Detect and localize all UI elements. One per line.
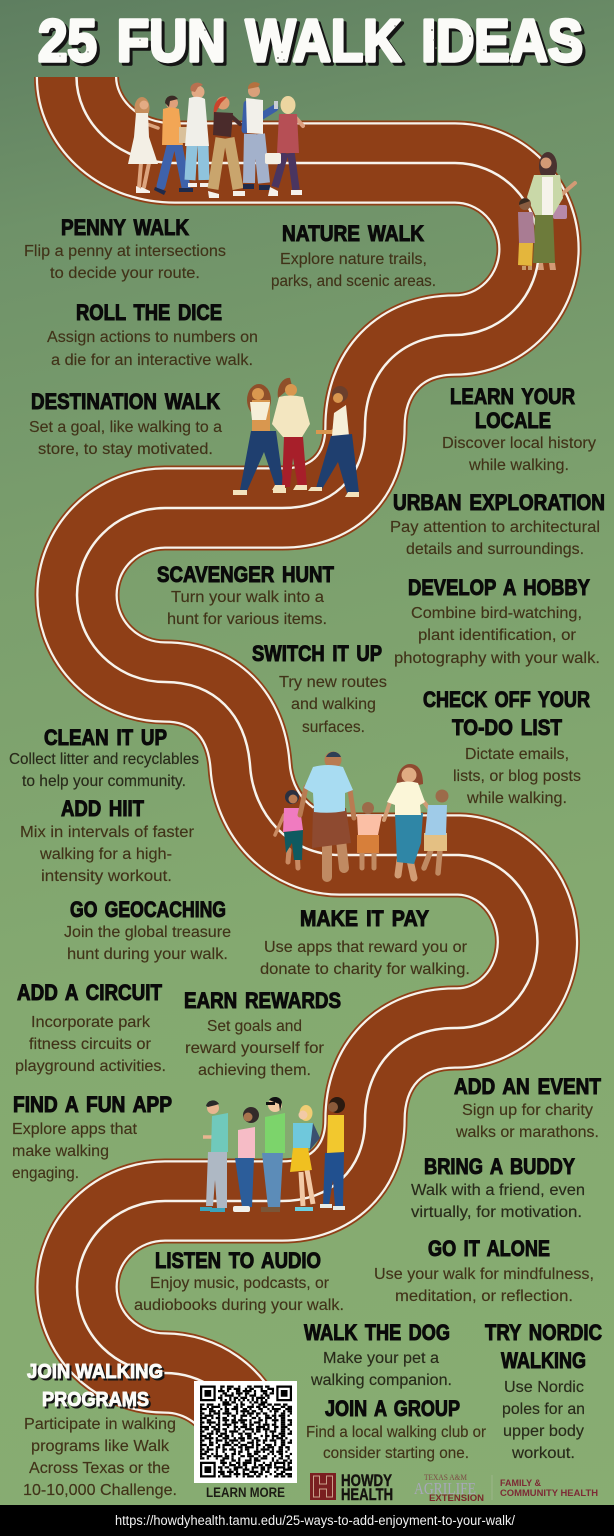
heading: WALK THE DOG [304, 1320, 450, 1345]
logo: Family & Community Health: FAMILY & [500, 1478, 541, 1489]
description [185, 1018, 325, 1079]
mother [527, 152, 575, 270]
learn more label: LEARN MORE [206, 1485, 285, 1500]
walker: woman in white dress [128, 97, 158, 193]
description: store, to stay motivated. [38, 441, 213, 458]
heading: GO GEOCACHING [70, 897, 226, 922]
running track [76, 77, 539, 1432]
description [271, 251, 436, 290]
description [23, 1416, 177, 1499]
description: details and surroundings. [406, 541, 584, 558]
heading [485, 1320, 602, 1373]
idea: Add HIIT [20, 796, 195, 885]
description: Flip a penny at intersections [24, 243, 226, 260]
man looking at phone [200, 1100, 228, 1212]
description [279, 674, 387, 736]
idea: Penny Walk [24, 215, 226, 282]
idea: Nature Walk [271, 221, 436, 290]
idea: Scavenger Hunt [157, 562, 334, 628]
heading [27, 1360, 163, 1411]
idea: Develop a Hobby [394, 575, 600, 667]
idea: Listen to Audio [134, 1248, 344, 1314]
heading: SWITCH IT UP [252, 641, 382, 666]
idea: Walk the Dog [304, 1320, 452, 1389]
description: and walking [291, 696, 376, 713]
description [306, 1424, 487, 1462]
heading: TO-DO LIST [452, 715, 562, 740]
walker: lab coat [185, 83, 210, 187]
heading: GO IT ALONE [428, 1236, 550, 1261]
description [167, 589, 327, 628]
description: Enjoy music, podcasts, or [150, 1275, 330, 1292]
description: workout. [511, 1445, 575, 1462]
description [64, 924, 231, 963]
description [260, 939, 470, 978]
idea: Check Off Your To-Do List [423, 687, 590, 807]
illustration: group of six walkers [128, 82, 303, 198]
description: surfaces. [302, 719, 365, 736]
heading: LISTEN TO AUDIO [155, 1248, 321, 1273]
woman in white crop top [233, 384, 286, 495]
description [502, 1379, 585, 1462]
heading: WALKING [501, 1348, 586, 1373]
idea: Join a Group [306, 1396, 487, 1462]
description: Walk with a friend, even [411, 1182, 585, 1199]
heading: JOIN A GROUP [325, 1396, 460, 1421]
heading [423, 687, 590, 740]
description: while walking. [466, 790, 567, 807]
description: Discover local history [442, 435, 596, 452]
heading: LOCALE [475, 408, 551, 433]
description: Join the global treasure [64, 924, 231, 941]
description: donate to charity for walking. [260, 961, 470, 978]
heading: LEARN YOUR [450, 384, 575, 409]
woman with short hair [308, 386, 359, 497]
description: Turn your walk into a [171, 589, 324, 606]
father [300, 752, 354, 877]
description: Collect litter and recyclables [9, 751, 199, 768]
description: Across Texas or the [29, 1460, 170, 1477]
description: Assign actions to numbers on [47, 329, 258, 346]
description [12, 1121, 138, 1182]
idea: Try Nordic Walking [485, 1320, 602, 1462]
description: while walking. [468, 457, 569, 474]
description: a die for an interactive walk. [51, 352, 253, 369]
description: 10-10,000 Challenge. [23, 1482, 177, 1499]
description: plant identification, or [418, 627, 577, 644]
illustration: five people standing in line [200, 1097, 345, 1212]
logo: Family & Community Health: COMMUNITY HEALTH [500, 1488, 598, 1499]
description: Mix in intervals of faster [20, 824, 195, 841]
description [29, 419, 222, 458]
heading: JOIN WALKING [27, 1360, 163, 1383]
man in sunglasses [261, 1097, 285, 1212]
heading: PENNY WALK [61, 215, 189, 240]
description: make walking [12, 1143, 109, 1160]
heading: BRING A BUDDY [424, 1154, 575, 1179]
heading: ROLL THE DICE [76, 300, 222, 325]
description: poles for an [502, 1401, 585, 1418]
idea: Find a Fun App [12, 1092, 172, 1182]
idea: Roll the Dice [47, 300, 258, 369]
heading: MAKE IT PAY [300, 906, 429, 931]
description: Set goals and [207, 1018, 302, 1035]
description: Participate in walking [24, 1416, 176, 1433]
description [411, 1182, 585, 1221]
description: audiobooks during your walk. [134, 1297, 344, 1314]
description: photography with your walk. [394, 650, 600, 667]
heading: NATURE WALK [282, 221, 424, 246]
description [9, 751, 199, 790]
illustration: three women walking [233, 378, 359, 497]
description [453, 746, 581, 807]
idea: Join Walking Programs [23, 1360, 177, 1499]
description: parks, and scenic areas. [271, 273, 436, 290]
description: to help your community. [22, 773, 186, 790]
description [455, 1102, 599, 1141]
description: walks or marathons. [455, 1124, 599, 1141]
small boy [357, 802, 382, 868]
illustration: family holding hands [275, 752, 448, 878]
walker: orange shirt [154, 96, 195, 195]
logo: Family & Community Health [492, 1475, 598, 1500]
logo: Texas A&M AgriLife Extension: AGRILIFE [414, 1479, 476, 1498]
description: walking for a high- [39, 846, 172, 863]
description: Use Nordic [504, 1379, 584, 1396]
description: consider starting one. [323, 1445, 469, 1462]
idea: Go It Alone [374, 1236, 594, 1305]
description: reward yourself for [185, 1040, 325, 1057]
description: Explore apps that [12, 1121, 138, 1138]
description: upper body [503, 1423, 584, 1440]
QR code [194, 1381, 297, 1483]
description: achieving them. [198, 1062, 311, 1079]
footer bar with URL [0, 1505, 614, 1536]
description [47, 329, 258, 369]
description: Sign up for charity [462, 1102, 593, 1119]
walker: man in vest with phone [243, 82, 278, 190]
man in yellow shirt [320, 1097, 345, 1210]
idea: Bring a Buddy [411, 1154, 585, 1221]
idea: Switch It Up [252, 641, 387, 736]
idea: Destination Walk [29, 389, 222, 458]
description: to decide your route. [50, 265, 200, 282]
description: Explore nature trails, [280, 251, 427, 268]
logo: Texas A&M AgriLife Extension [414, 1472, 484, 1503]
description: Use your walk for mindfulness, [374, 1266, 594, 1283]
idea: Go Geocaching [64, 897, 231, 963]
logo: Howdy Health: HEALTH [341, 1486, 393, 1504]
logo: Texas A&M AgriLife Extension: TEXAS A&M [424, 1472, 467, 1482]
description: Use apps that reward you or [264, 939, 468, 956]
idea: Earn Rewards [184, 988, 341, 1079]
idea: Make It Pay [260, 906, 470, 978]
description: virtually, for motivation. [411, 1204, 582, 1221]
blonde woman with backpack [290, 1105, 320, 1211]
illustration: mother and child [518, 152, 575, 270]
description: lists, or blog posts [453, 768, 581, 785]
description: programs like Walk [31, 1438, 170, 1455]
description: Set a goal, like walking to a [29, 419, 222, 436]
description: Incorporate park [31, 1014, 151, 1031]
description: Try new routes [279, 674, 387, 691]
logo: Howdy Health [310, 1472, 393, 1504]
description: playground activities. [15, 1058, 166, 1075]
description [15, 1014, 166, 1075]
mother [384, 764, 434, 878]
woman with curly hair [233, 1107, 259, 1212]
idea: Add a Circuit [15, 980, 166, 1075]
idea: Add an Event [454, 1074, 601, 1141]
description: walking companion. [310, 1372, 452, 1389]
footer bar with URL: https://howdyhealth.tamu.edu/25-ways-to-add-enjoyment-to-your-walk/ [115, 1513, 515, 1528]
logo: Texas A&M AgriLife Extension: EXTENSION [429, 1493, 484, 1503]
description [20, 824, 195, 885]
heading: EARN REWARDS [184, 988, 341, 1013]
description [442, 435, 596, 474]
description: hunt for various items. [167, 611, 327, 628]
heading: PROGRAMS [42, 1388, 149, 1411]
description: fitness circuits or [29, 1036, 152, 1053]
walker: red hair woman [208, 96, 245, 198]
description: meditation, or reflection. [395, 1288, 573, 1305]
idea: Urban Exploration [390, 490, 605, 558]
description: Make your pet a [323, 1350, 439, 1367]
child [518, 198, 535, 270]
idea: Clean It Up [9, 725, 199, 790]
description: Dictate emails, [465, 746, 569, 763]
heading: SCAVENGER HUNT [157, 562, 334, 587]
heading: ADD HIIT [61, 796, 144, 821]
description [310, 1350, 452, 1389]
description [24, 243, 226, 282]
walker: blonde woman with bag [265, 96, 303, 196]
description [134, 1275, 344, 1314]
description: Pay attention to architectural [390, 519, 600, 536]
heading: FIND A FUN APP [13, 1092, 172, 1117]
description: hunt during your walk. [67, 946, 228, 963]
logo: Howdy Health: HOWDY [341, 1472, 392, 1490]
girl [275, 790, 303, 868]
description: intensity workout. [41, 868, 172, 885]
description: Find a local walking club or [306, 1424, 487, 1441]
description [374, 1266, 594, 1305]
description: Combine bird-watching, [411, 605, 582, 622]
heading [450, 384, 575, 433]
heading: DESTINATION WALK [31, 389, 220, 414]
heading: ADD A CIRCUIT [17, 980, 162, 1005]
description: engaging. [12, 1165, 79, 1182]
description [394, 605, 600, 667]
heading: CLEAN IT UP [44, 725, 167, 750]
idea: Learn Your Locale [442, 384, 596, 474]
description [390, 519, 600, 558]
woman in cream hoodie [272, 378, 310, 490]
older boy [424, 790, 448, 873]
